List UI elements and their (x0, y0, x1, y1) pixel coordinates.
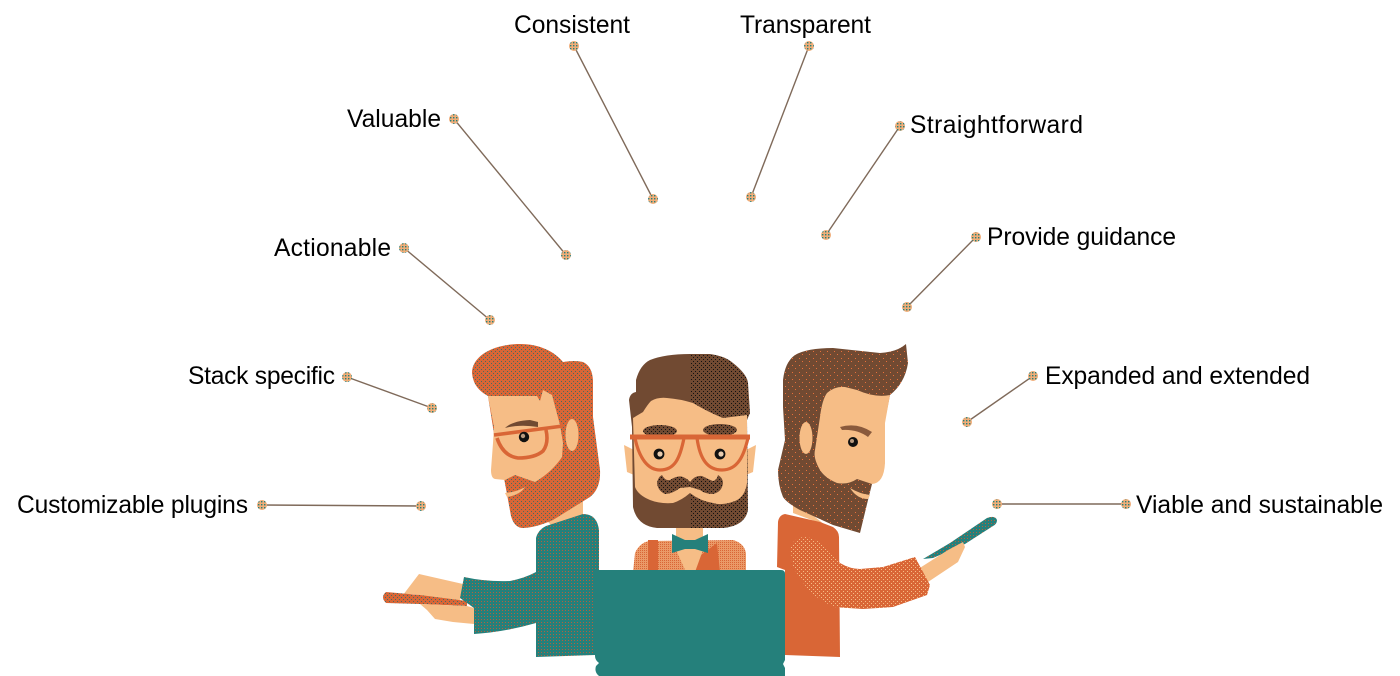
middle man hair and beard right (690, 354, 750, 528)
label: Transparent: Transparent (740, 12, 871, 39)
label: Straightforward: Straightforward (910, 112, 1083, 139)
label: Viable and sustainable: Viable and sustainable (1136, 492, 1383, 519)
middle man eyes (654, 449, 725, 459)
middle man neck (676, 525, 703, 572)
middle man suspenders (648, 540, 720, 572)
label: Customizable plugins (17, 492, 426, 519)
left man hand lower (420, 604, 474, 624)
right man eye (848, 437, 858, 447)
left man hand upper (403, 574, 463, 600)
label: Expanded and extended: Expanded and extended (1045, 363, 1310, 390)
label: Valuable (347, 106, 571, 260)
left man glasses (494, 426, 563, 458)
middle man hair and beard left (629, 354, 691, 528)
label: Stack specific: Stack specific (188, 363, 335, 390)
left man ear (566, 419, 578, 451)
right man smile (850, 488, 870, 499)
middle man ears (624, 445, 756, 475)
middle man eyebrows (643, 424, 737, 437)
left man tablet (383, 592, 467, 606)
label: Provide guidance (902, 224, 1176, 312)
left man sweater (460, 514, 599, 657)
middle man face (633, 398, 747, 504)
right man phone (923, 517, 997, 559)
left man face (488, 390, 563, 482)
laptop (595, 570, 785, 676)
middle man glasses (630, 437, 750, 470)
right man ear (800, 422, 812, 454)
label: Valuable: Valuable (347, 106, 441, 133)
label: Viable and sustainable (992, 492, 1383, 519)
right man eyebrow (840, 425, 872, 437)
label: Actionable: Actionable (274, 235, 391, 262)
left man eye (519, 432, 529, 442)
label: Actionable (274, 235, 495, 325)
label: Customizable plugins: Customizable plugins (17, 492, 248, 519)
middle man bow tie (672, 534, 708, 553)
label: Consistent (514, 12, 658, 204)
right man hair and beard (778, 344, 908, 533)
label: Straightforward (821, 112, 1083, 240)
left man hair and beard (472, 344, 600, 528)
label: Stack specific (188, 363, 437, 413)
middle man shirt (633, 540, 746, 572)
middle man mustache (657, 475, 723, 494)
left man smile (505, 487, 525, 497)
right man body (777, 514, 840, 657)
right man face (815, 387, 890, 484)
right man arm (790, 537, 930, 609)
character: middle man with laptop (595, 354, 785, 676)
character: right man with brown hair (777, 344, 997, 657)
label: Provide guidance: Provide guidance (987, 224, 1176, 251)
character: left man with red hair (383, 344, 600, 657)
label: Consistent: Consistent (514, 12, 630, 39)
label: Transparent (740, 12, 871, 202)
label: Expanded and extended (962, 363, 1310, 427)
left man eyebrow (505, 420, 538, 428)
right man hand (915, 542, 965, 584)
